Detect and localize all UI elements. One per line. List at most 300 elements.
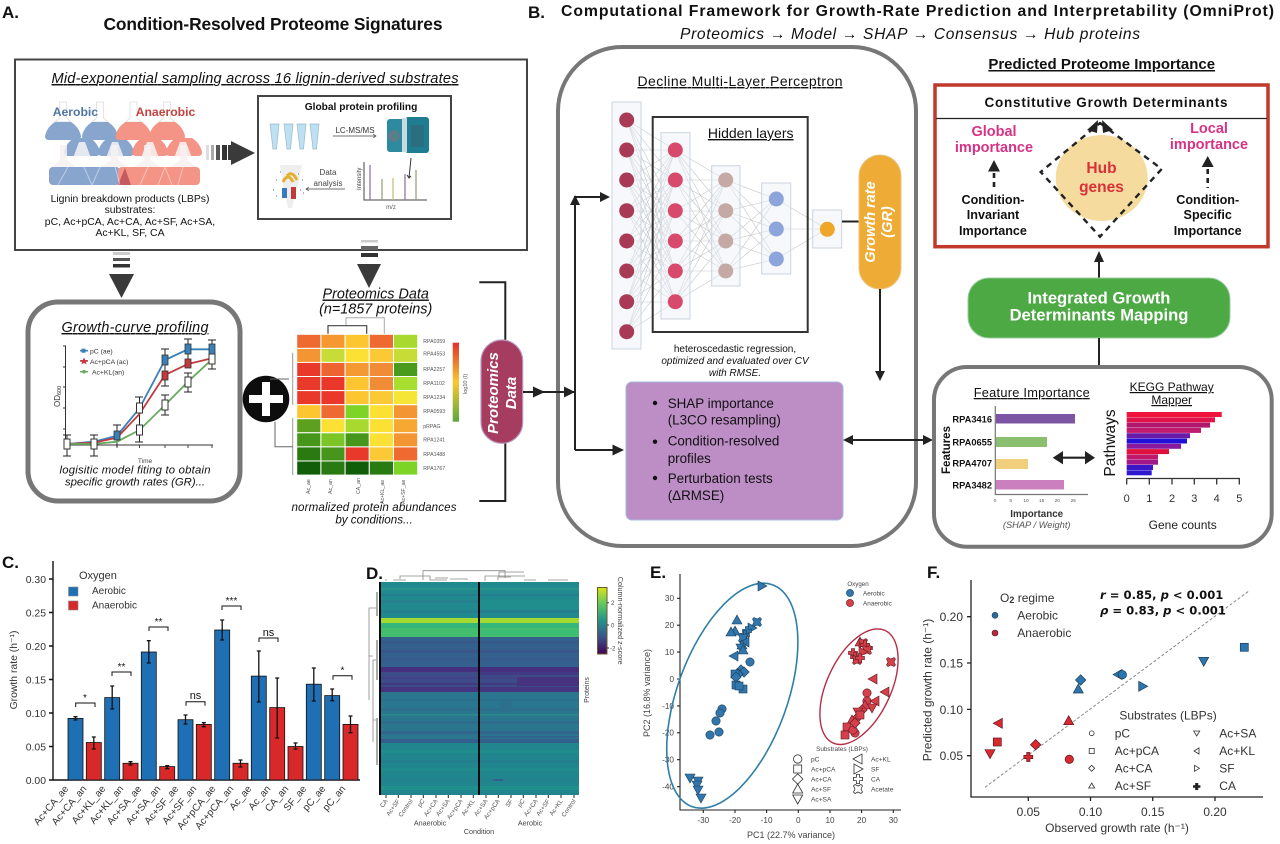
constitutive growth determinants box <box>935 85 1268 247</box>
spectrum plot <box>357 158 427 211</box>
y tick labels: 0.25 <box>26 608 46 620</box>
axis tick labels: -30 <box>697 816 710 825</box>
hub genes circle <box>1056 135 1148 221</box>
x tick labels: pC_ae <box>301 784 329 814</box>
substrates legend: Ac+KL <box>871 756 891 764</box>
network caption: optimized and evaluated over CV <box>661 356 810 367</box>
legend <box>80 348 128 376</box>
panel label F: F. <box>927 563 940 582</box>
hidden layer 3 nodes <box>769 192 784 266</box>
axis tick labels: -40 <box>662 782 674 792</box>
arrow: proteomics pill to framework <box>523 386 575 398</box>
growth rate pill: Growth rate <box>863 181 879 263</box>
connector: feature box to mapping <box>1098 338 1100 367</box>
y tick labels: 0.10 <box>940 703 963 717</box>
significance brackets: ns <box>263 627 275 639</box>
substrates legend: Ac+pCA <box>811 766 836 774</box>
x tick labels: 0.15 <box>1141 805 1165 819</box>
LBP substrates text: substrates: <box>105 205 155 216</box>
dendrograms <box>270 318 384 475</box>
predicted proteome importance heading: Predicted Proteome Importance <box>988 56 1215 73</box>
condition tick labels: SF <box>504 798 515 809</box>
substrates legend: Ac+CA <box>811 776 832 784</box>
growth curve chart: 600 <box>57 386 63 395</box>
axis titles: PC1 (22.7% variance) <box>747 830 835 840</box>
correlation statistics <box>1100 588 1226 618</box>
sampling box <box>15 60 527 250</box>
heatmap colour bar: 0 <box>611 624 615 630</box>
oxygen legend <box>846 581 893 608</box>
anaerobic confidence ellipse <box>804 617 914 756</box>
MLP heading: Decline Multi-Layer Perceptron <box>638 73 842 89</box>
SHAP box <box>626 382 843 520</box>
icon: aerobic and anaerobic flasks <box>45 102 202 185</box>
feature importance chart: Feature Importance <box>974 385 1090 400</box>
y tick labels <box>26 575 46 787</box>
protein row labels: RPA2257 <box>423 367 445 373</box>
substrates legend: Acetate <box>871 786 894 794</box>
significance brackets: ns <box>190 690 202 702</box>
anaerobic predictions <box>985 716 1074 764</box>
proteins axis label: Proteins <box>584 677 591 703</box>
significance brackets: *** <box>226 596 237 607</box>
oxygen legend: Oxygen <box>79 570 117 582</box>
protein row labels: RPA1767 <box>423 466 445 472</box>
proteomics data pill <box>481 340 523 443</box>
x tick labels: Ac+KL_an <box>88 784 126 827</box>
dashed diamond <box>1041 123 1162 237</box>
growth rate pill <box>859 155 901 289</box>
hub genes circle: Hub <box>1086 160 1117 177</box>
KEGG pathway chart: 1 <box>1146 493 1152 505</box>
x tick labels: Ac+pCA_an <box>193 784 236 832</box>
growth-curve caption: logisitic model fiting to obtain <box>60 464 210 476</box>
axis tick labels: -20 <box>729 816 741 825</box>
x tick marks <box>386 795 574 798</box>
axis tick labels: -20 <box>662 728 674 738</box>
arrow: input to SHAP box <box>575 444 624 456</box>
x tick labels: Ac+SF_ae <box>143 784 182 827</box>
axis tick labels: 30 <box>889 816 898 825</box>
condition column labels: Ac_an <box>328 479 334 494</box>
y tick labels: 0.20 <box>26 642 46 653</box>
feature importance chart: 15 <box>1039 498 1045 504</box>
significance brackets: * <box>83 693 87 704</box>
aerobic points <box>685 581 767 803</box>
panel E: PCA scatter <box>640 563 914 840</box>
LBP substrates text: Ac+KL, SF, CA <box>95 228 165 239</box>
O2 regime legend: O <box>1000 591 1009 605</box>
panel label D: D. <box>366 564 383 583</box>
axis tick labels <box>662 594 898 825</box>
group labels: Aerobic <box>518 818 543 828</box>
network caption: with RMSE. <box>709 368 761 379</box>
substrates legend: Ac+KL <box>1219 744 1255 758</box>
oxygen legend: Anaerobic <box>92 600 137 612</box>
feature importance chart: Features <box>941 426 953 474</box>
condition tick labels: pC <box>516 798 527 809</box>
x tick labels: 0.05 <box>1017 805 1040 819</box>
x tick labels: Ac+KL_ae <box>70 784 109 827</box>
protein row labels: RPA0593 <box>423 409 445 415</box>
substrates legend: SF <box>1219 762 1235 776</box>
y axis label: Growth rate (h⁻¹) <box>9 631 20 709</box>
connector: output to growth rate <box>842 220 859 222</box>
condition tick labels: Ac+SF <box>385 798 402 818</box>
legend: pC (ae) <box>90 348 113 356</box>
feature importance chart: 20 <box>1055 498 1060 504</box>
proteomics data heading: Proteomics Data <box>323 286 429 302</box>
substrates legend: Substrates (LBPs) <box>1119 708 1217 722</box>
KEGG pathway chart: 0 <box>1124 493 1130 505</box>
arrow: sampling to proteomics data <box>357 240 381 288</box>
O2 regime legend: Aerobic <box>1017 608 1058 622</box>
x tick labels <box>32 784 348 832</box>
condition-specific importance: Condition- <box>1176 193 1239 207</box>
x tick labels: SF_ae <box>282 784 310 814</box>
hidden layer 2 nodes <box>718 172 733 278</box>
colour scale: log10 (I) <box>463 374 469 394</box>
protein row labels <box>423 339 445 472</box>
condition column labels: Ac_ae <box>306 479 312 494</box>
output node <box>820 222 835 237</box>
KEGG pathway chart: 5 <box>1236 493 1242 505</box>
condition column labels <box>306 478 407 504</box>
substrates legend: pC <box>811 756 820 764</box>
anaerobic points <box>841 637 896 739</box>
global importance: importance <box>955 140 1033 156</box>
protein row labels: RPA0359 <box>423 339 445 345</box>
feature importance chart: Importance <box>1010 509 1064 520</box>
x tick labels: Ac+pCA_ae <box>175 784 219 832</box>
growth curve chart: Time <box>138 458 152 465</box>
x tick labels: Ac+SF_an <box>161 784 199 827</box>
x tick labels: Ac_an <box>247 784 273 813</box>
group labels: Anaerobic <box>414 818 447 828</box>
proteomics data heading: (n=1857 proteins) <box>319 302 432 318</box>
KEGG pathway chart: Gene counts <box>1149 518 1217 532</box>
icon: volcano plot <box>273 165 304 208</box>
growth curve chart <box>53 339 216 465</box>
double arrow: SHAP box to feature mapping <box>843 435 933 445</box>
panel label C: C. <box>2 553 19 572</box>
input layer nodes <box>619 112 634 339</box>
local importance: importance <box>1170 137 1248 153</box>
group labels <box>414 818 543 836</box>
SHAP bullet list: Perturbation tests <box>668 471 773 486</box>
feature importance chart: 25 <box>1071 498 1076 504</box>
proteomics data pill: Data <box>503 377 520 409</box>
panel A title: Condition-Resolved Proteome Signatures <box>104 14 442 34</box>
sampling heading: Mid-exponential sampling across 16 lignin-derived substrates <box>52 71 458 87</box>
axis tick labels: 20 <box>857 816 867 825</box>
SHAP bullet list: SHAP importance <box>668 396 774 411</box>
y tick labels: 0.10 <box>26 709 46 720</box>
condition-specific importance: Importance <box>1174 224 1242 238</box>
y tick labels: 0.05 <box>940 749 963 763</box>
heatmap caption: normalized protein abundances <box>292 501 457 514</box>
row dendrogram <box>369 608 378 742</box>
SHAP bullet list <box>653 396 781 503</box>
significance brackets: ** <box>155 617 162 628</box>
condition tick labels: Ac+CA <box>523 797 540 818</box>
y tick labels <box>940 610 963 763</box>
SHAP bullet list: (L3CO resampling) <box>668 412 781 428</box>
global protein profiling box <box>258 96 451 219</box>
arrow: growth rate to SHAP box <box>875 289 885 381</box>
oxygen legend: Aerobic <box>92 586 126 597</box>
heatmap group dividers <box>380 582 479 795</box>
x tick labels: Ac+SA_ae <box>105 784 145 827</box>
axis titles: Observed growth rate (h⁻¹) <box>1045 821 1189 835</box>
axes <box>49 561 360 780</box>
axis tick labels: 10 <box>665 648 674 657</box>
growth rate pill: (GR) <box>880 206 896 238</box>
condition tick labels: Ac+KL <box>548 798 565 817</box>
substrates legend <box>1089 708 1256 793</box>
condition tick labels: CA <box>379 797 390 809</box>
feature importance chart: (SHAP / Weight) <box>1003 520 1071 530</box>
growth-curve caption: specific growth rates (GR)... <box>65 476 205 488</box>
global protein profiling box: Global protein profiling <box>305 102 417 113</box>
legend: Ac+pCA (ac) <box>90 359 128 366</box>
substrates legend: Ac+pCA <box>1115 744 1159 758</box>
x tick labels: Ac+SA_an <box>124 784 163 827</box>
heatmap colour bar: -2 <box>610 646 616 652</box>
growth curve chart: OD <box>53 395 62 407</box>
icon: aerobic and anaerobic flasks: Aerobic <box>53 105 98 119</box>
axis tick labels: 0 <box>669 675 674 684</box>
panel label E: E. <box>650 563 666 582</box>
heatmap body <box>380 582 579 795</box>
x tick labels <box>1017 805 1227 819</box>
panel B subtitle: Proteomics → Model → SHAP → Consensus → Hub proteins <box>680 26 1140 43</box>
growth-curve heading: Growth-curve profiling <box>62 320 208 336</box>
feature importance chart: RPA4707 <box>952 459 992 469</box>
substrates legend: Ac+SF <box>811 786 831 794</box>
protein row labels: RPA1488 <box>423 452 445 458</box>
LBP substrates text: pC, Ac+pCA, Ac+CA, Ac+SF, Ac+SA, <box>45 217 215 228</box>
feature importance chart: 0 <box>994 498 997 504</box>
local importance: Local <box>1190 121 1228 137</box>
protein row labels: RPA1234 <box>423 395 445 401</box>
heatmap colour bar: Column-normalized z-score <box>616 577 625 665</box>
small proteomics heatmap <box>270 318 469 504</box>
condition tick labels: Ac+SF <box>535 798 552 818</box>
data analysis label and arrow <box>306 168 345 191</box>
axis tick labels: 10 <box>825 816 835 825</box>
global importance: Global <box>971 124 1017 140</box>
KEGG pathway chart: 4 <box>1214 493 1220 505</box>
KEGG pathway chart: Pathways <box>1102 409 1119 477</box>
anaerobic bars <box>86 708 358 780</box>
significance brackets: ** <box>118 662 125 673</box>
significance brackets <box>76 596 352 707</box>
axis tick labels: 30 <box>665 594 674 603</box>
proteomics data pill: Proteomics <box>485 352 502 434</box>
panel E: PCA scatter: PC2 (16.8% variance) <box>642 649 652 737</box>
growth-curve profiling panel <box>28 302 240 501</box>
correlation statistics: r = 0.85, p < 0.001 <box>1100 588 1223 602</box>
KEGG pathway chart: 2 <box>1169 493 1175 505</box>
substrates legend: CA <box>871 776 881 784</box>
panel F: predicted vs observed scatter: Predicted growth rate (h⁻¹) <box>920 619 934 761</box>
double arrow: features and pathways <box>1053 451 1095 464</box>
condition column labels: CA_an <box>356 478 362 494</box>
axis tick labels: -10 <box>761 816 773 825</box>
hidden layers box <box>653 117 808 332</box>
data analysis label and arrow: Data <box>320 168 337 177</box>
hidden layer 1 nodes <box>668 142 683 309</box>
x tick labels: pC_an <box>321 784 348 814</box>
panel label A: A. <box>2 3 19 22</box>
substrates legend: Ac+CA <box>1115 762 1152 776</box>
column dendrogram <box>386 571 568 581</box>
icon: mass spectrometer <box>387 117 429 153</box>
oxygen legend: Aerobic <box>863 590 885 598</box>
SHAP bullet list: (ΔRMSE) <box>668 488 724 503</box>
error bars <box>74 620 352 769</box>
LC-MS label and arrow <box>333 126 376 138</box>
substrates legend: Ac+SA <box>1219 726 1256 740</box>
integrated growth determinants mapping: Integrated Growth <box>1028 288 1170 308</box>
O2 regime legend <box>992 591 1071 640</box>
condition tick labels: Ac+pCA <box>483 797 502 821</box>
condition-invariant importance: Condition- <box>962 193 1024 207</box>
axis tick labels: 0 <box>796 816 801 825</box>
x tick labels: 0.10 <box>1079 805 1103 819</box>
neural network diagram <box>612 102 842 349</box>
heatmap colour bar: 2 <box>611 601 615 607</box>
icon: aerobic and anaerobic flasks: Anaerobic <box>136 105 196 119</box>
panel F: predicted vs observed scatter <box>920 563 1263 835</box>
identity line <box>985 591 1249 787</box>
feature and pathway container <box>934 367 1272 547</box>
aerobic bars <box>68 630 340 780</box>
hub genes circle: genes <box>1079 179 1124 196</box>
integrated growth determinants mapping: Determinants Mapping <box>1010 306 1188 324</box>
substrates legend: Ac+SF <box>1115 779 1151 793</box>
substrates legend <box>792 746 894 804</box>
feature importance chart: 10 <box>1023 498 1029 504</box>
substrates legend: SF <box>871 766 879 774</box>
condition-specific importance: Specific <box>1184 208 1232 222</box>
bracket joining inputs <box>479 282 505 501</box>
axis tick labels: -10 <box>662 702 674 711</box>
KEGG pathway chart: KEGG Pathway <box>1130 380 1214 394</box>
arrowheads into heading <box>1087 120 1113 133</box>
feature importance chart: RPA3482 <box>952 480 992 490</box>
O2 regime legend: Anaerobic <box>1017 626 1071 640</box>
group labels: Condition <box>464 827 494 836</box>
row dendrogram blocks <box>376 592 378 765</box>
substrates legend: Substrates (LBPs) <box>816 746 868 753</box>
heatmap colour bar <box>598 577 625 665</box>
O2 regime legend: 2 <box>1009 595 1014 605</box>
spectrum plot: Intensity <box>357 168 363 190</box>
icon: sample tubes <box>270 124 319 149</box>
substrates legend: Ac+SA <box>811 796 832 804</box>
condition column labels: Ac+KL_ae <box>380 480 386 504</box>
substrates legend: CA <box>1219 779 1236 793</box>
x tick labels: Ac+CA_an <box>50 784 89 828</box>
network caption: heteroscedastic regression, <box>674 344 796 355</box>
arrow: condition-specific to local <box>1202 156 1214 188</box>
y tick labels: 0.00 <box>26 776 46 787</box>
LBP substrates text: Lignin breakdown products (LBPs) <box>51 194 209 205</box>
condition tick labels: Ac+SA <box>435 797 452 818</box>
panel B: computational framework <box>523 3 1274 547</box>
legend: Ac+KL(an) <box>92 370 124 376</box>
axes <box>677 574 901 813</box>
condition tick labels: Ac+SA <box>473 797 490 818</box>
aerobic half variations <box>480 630 579 635</box>
panel A: condition-resolved proteome signatures <box>2 3 527 526</box>
protein row labels: RPA4553 <box>423 352 445 358</box>
protein row labels: RPA1102 <box>423 381 445 387</box>
LC-MS label and arrow: LC-MS/MS <box>335 126 375 135</box>
condition-invariant importance: Invariant <box>967 208 1020 222</box>
MLP container <box>523 47 916 546</box>
feature importance chart: RPA3416 <box>952 415 992 425</box>
oxygen legend: Anaerobic <box>863 600 893 608</box>
KEGG pathway chart: 3 <box>1191 493 1197 505</box>
data analysis label and arrow: analysis <box>314 179 342 188</box>
O2 regime legend: regime <box>1014 591 1055 605</box>
substrates legend: pC <box>1115 726 1130 740</box>
condition tick labels <box>379 797 578 821</box>
SHAP bullet list: Condition-resolved <box>668 434 779 448</box>
x tick labels: CA_an <box>263 784 291 814</box>
feature importance chart: 5 <box>1009 498 1012 504</box>
oxygen legend: Oxygen <box>847 581 869 588</box>
arrow: input to network <box>570 192 610 450</box>
arrow: condition-invariant to global <box>988 160 1000 190</box>
protein row labels: pRPAG <box>423 424 441 430</box>
y tick labels: 0.15 <box>940 656 963 670</box>
hidden layers box: Hidden layers <box>708 125 794 141</box>
condition tick labels: Ac+KL <box>460 798 477 817</box>
y tick labels: 0.15 <box>26 676 46 686</box>
oxygen legend <box>68 570 137 612</box>
condition tick labels: Ac+pCA <box>446 797 465 821</box>
icon: plus sign <box>243 376 289 422</box>
condition tick labels: Control <box>397 798 415 818</box>
aerobic confidence ellipse <box>640 566 824 825</box>
aerobic predictions <box>1073 643 1248 693</box>
axes <box>967 580 1263 801</box>
KEGG pathway chart <box>1102 380 1242 532</box>
feature importance chart: RPA0655 <box>952 438 992 448</box>
axis tick labels: 20 <box>665 621 674 630</box>
x tick labels: Ac_ae <box>228 784 255 813</box>
feature importance chart <box>941 385 1090 530</box>
x tick labels: 0.20 <box>1203 805 1227 819</box>
panel D: clustered heatmap <box>366 564 625 836</box>
y tick labels: 0.30 <box>26 575 46 586</box>
significance brackets: * <box>341 666 345 676</box>
arrow: sampling to growth curve <box>109 252 134 298</box>
condition tick labels: pC <box>416 798 427 809</box>
spectrum plot: m/z <box>386 205 396 211</box>
condition column labels: Ac+SF_ae <box>401 480 407 504</box>
condition tick labels: Control <box>560 798 578 818</box>
panel B title: Computational Framework for Growth-Rate Prediction and Interpretability (OmniProt) <box>561 3 1274 20</box>
axis tick labels: -30 <box>662 756 674 764</box>
colour scale <box>453 343 469 422</box>
condition tick labels: Ac+CA <box>423 797 440 818</box>
y tick labels: 0.05 <box>26 742 46 754</box>
